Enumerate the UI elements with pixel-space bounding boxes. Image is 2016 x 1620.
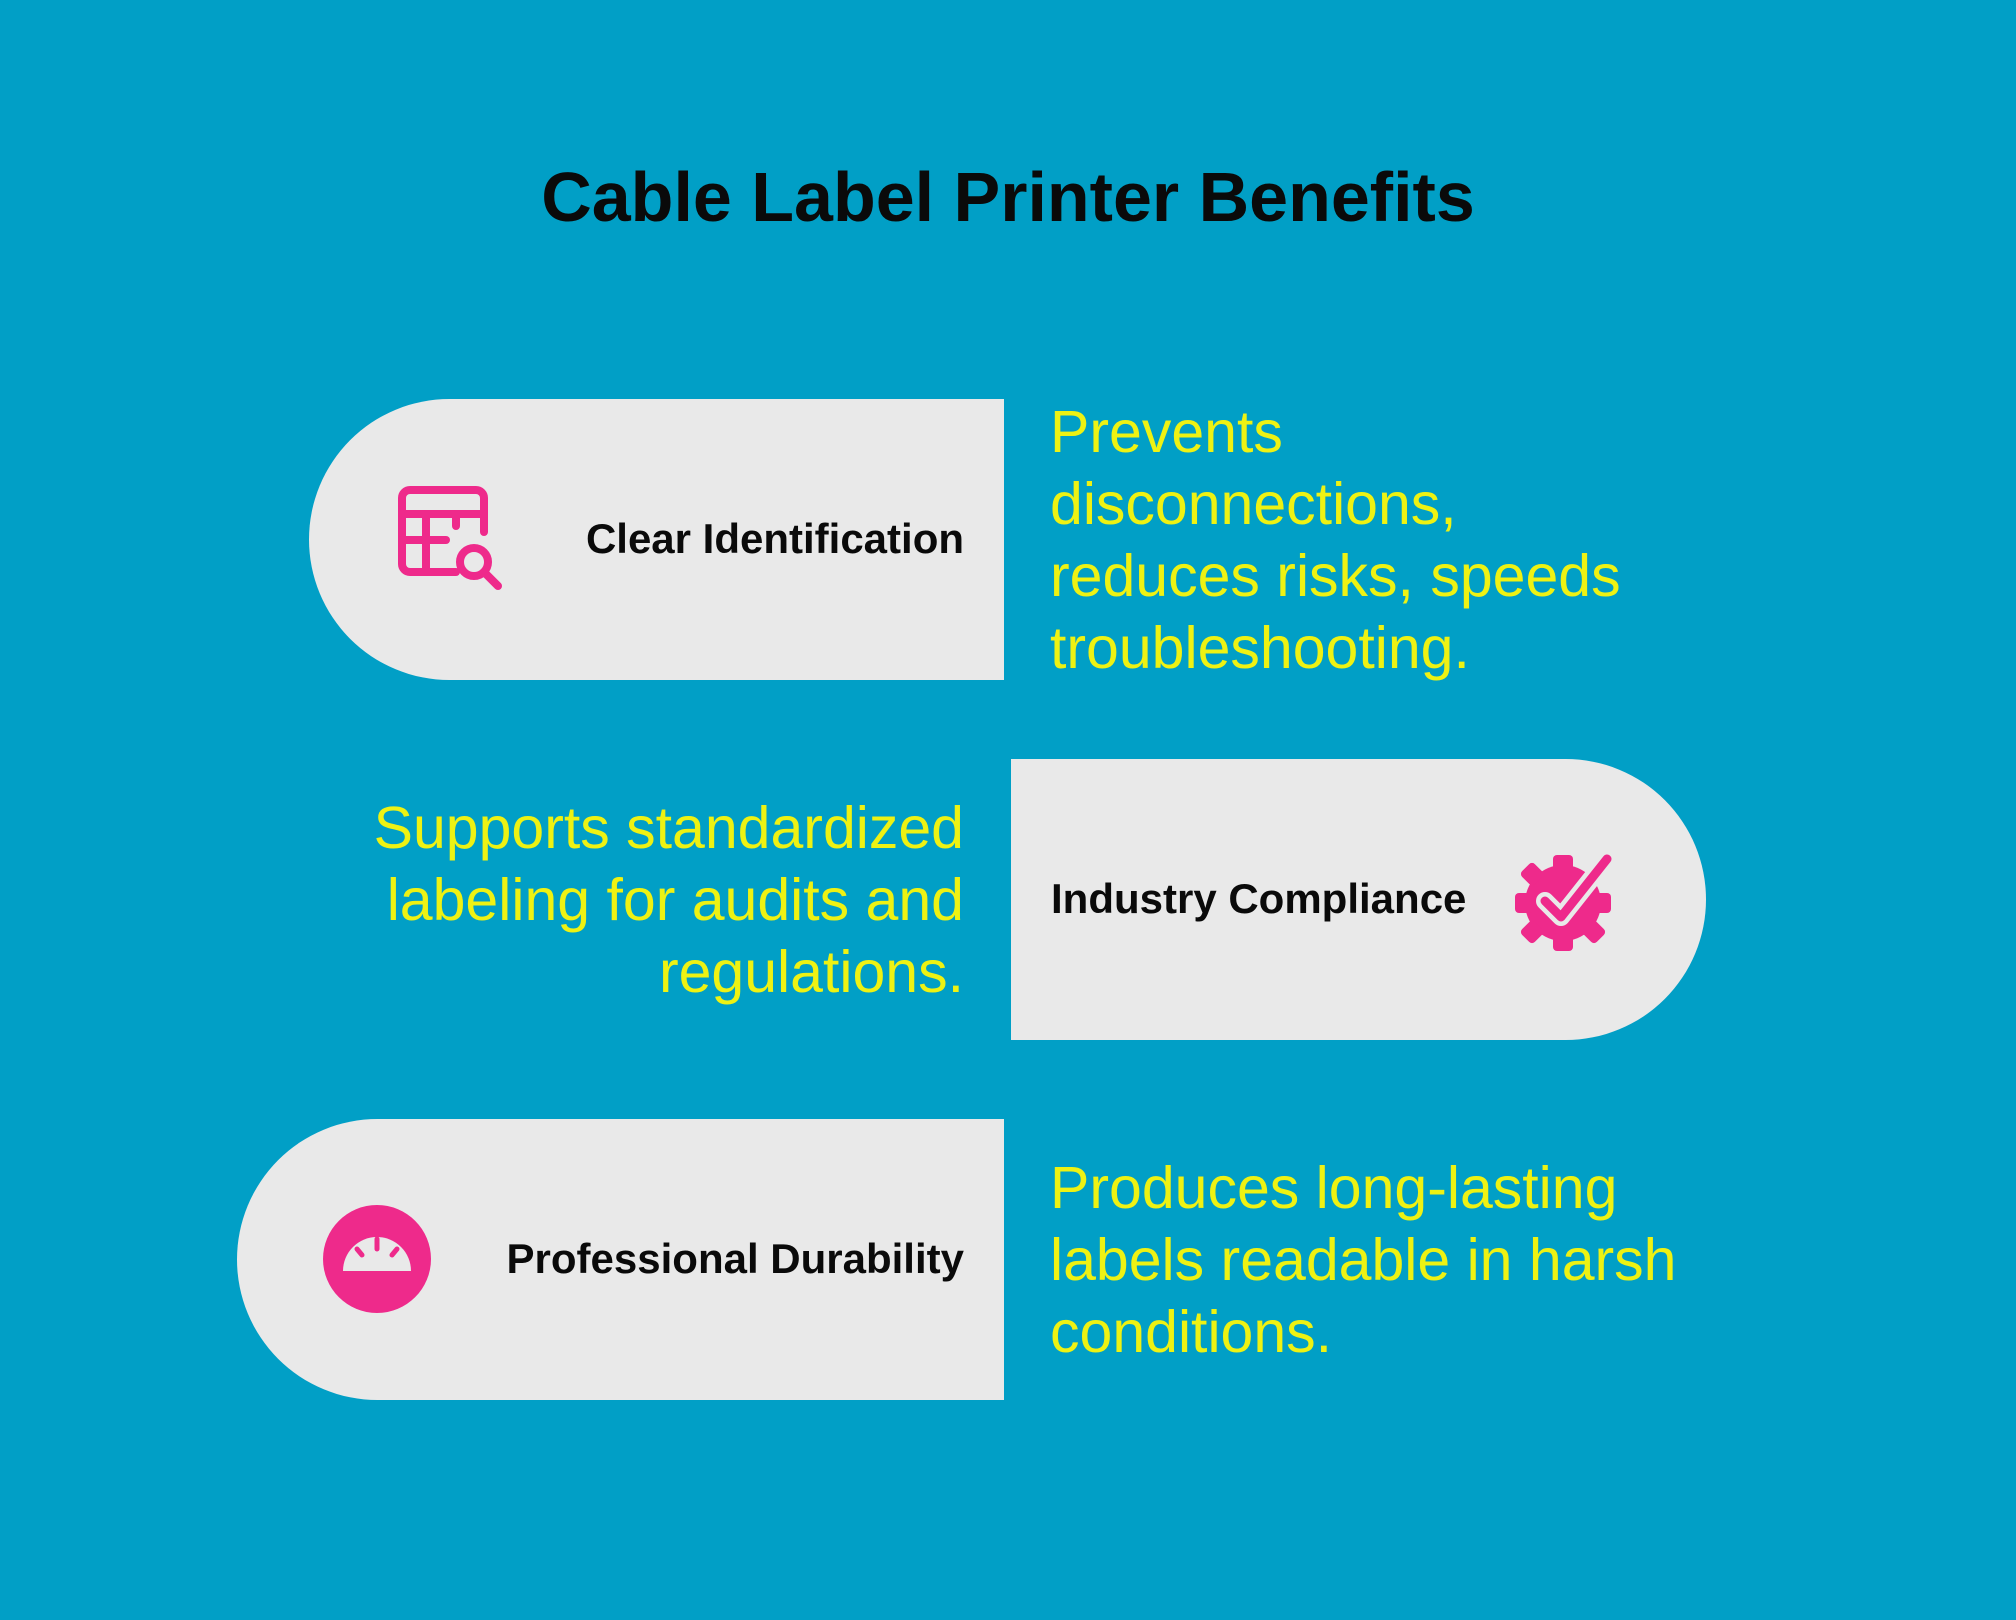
text: clear identification description: troubleshooting.	[1050, 615, 1470, 681]
panel: industry compliance	[1011, 759, 1706, 1040]
text: clear identification description: Prevents	[1050, 399, 1283, 465]
text: professional durability description: labels readable in harsh	[1050, 1227, 1676, 1293]
title: Cable Label Printer Benefits	[541, 158, 1475, 236]
text: industry compliance description: labeling for audits and	[387, 867, 964, 933]
icon: table search	[398, 486, 502, 590]
label: Clear Identification	[586, 515, 964, 562]
text: clear identification description: reduces risks, speeds	[1050, 543, 1621, 609]
text: professional durability description: conditions.	[1050, 1299, 1332, 1365]
label: Industry Compliance	[1051, 875, 1466, 922]
text: industry compliance description: Supports standardized	[374, 795, 964, 861]
panel: clear identification	[309, 399, 1004, 680]
text: professional durability description: Produces long-lasting	[1050, 1155, 1617, 1221]
label: Professional Durability	[507, 1235, 964, 1282]
text: clear identification description: disconnections,	[1050, 471, 1457, 537]
text: industry compliance description: regulations.	[659, 939, 964, 1005]
icon: gauge	[323, 1205, 431, 1313]
icon: gear check	[1515, 854, 1612, 951]
text: professional durability description	[1050, 1155, 1676, 1365]
panel: professional durability	[237, 1119, 1004, 1400]
text: clear identification description	[1050, 399, 1621, 681]
text: industry compliance description	[374, 795, 964, 1005]
